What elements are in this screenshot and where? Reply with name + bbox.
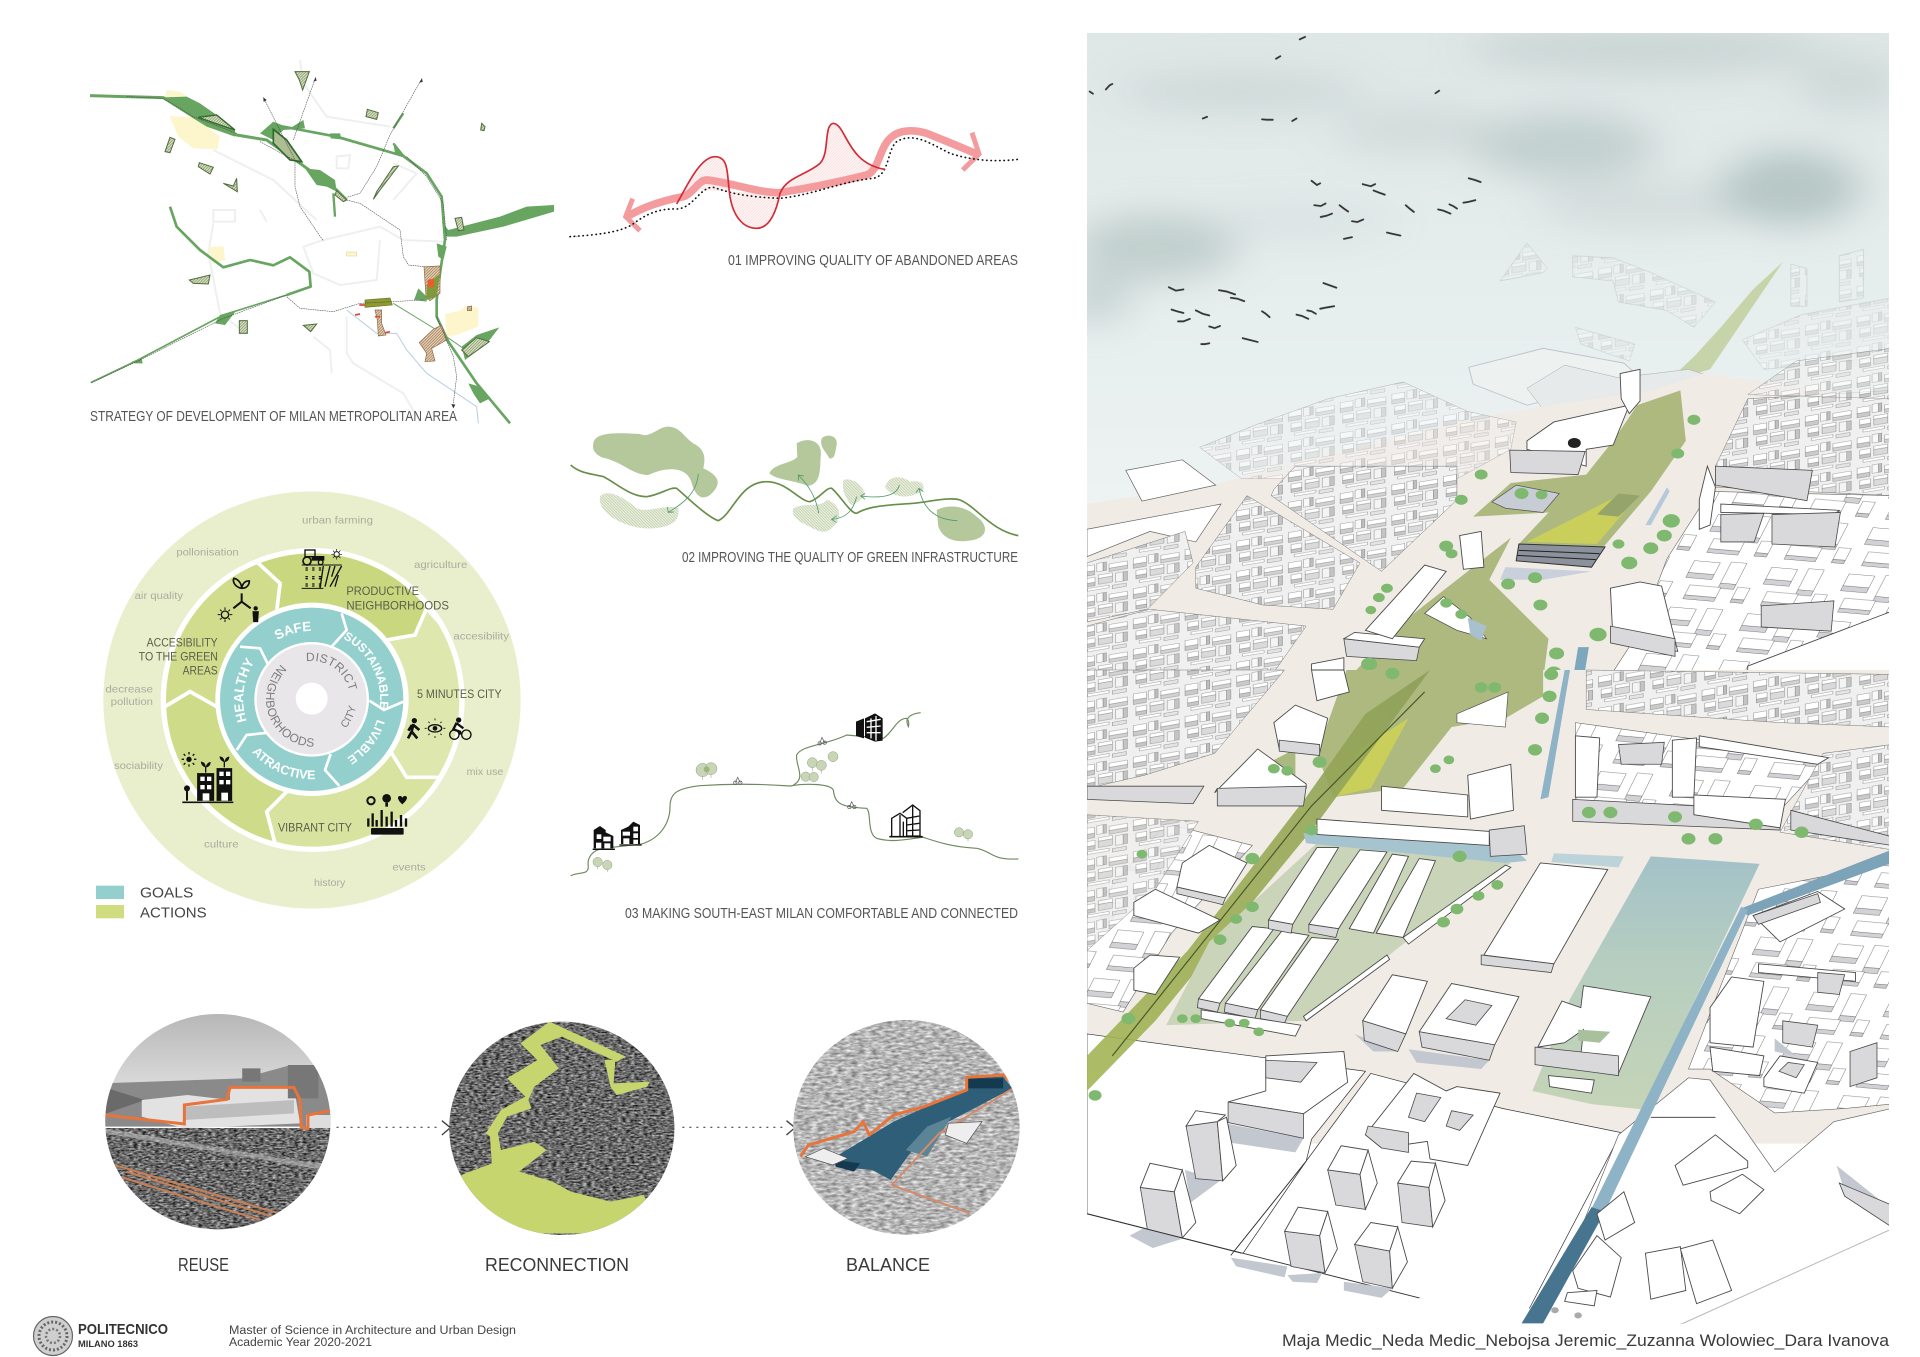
goal labels: HEALTHY [234,657,253,723]
icon: glass buildings [889,805,923,837]
arrow heads [263,77,455,408]
outer ring labels: pollution [111,697,153,708]
canal pieces [1645,487,1670,525]
pale yellow areas [165,90,478,337]
arrow [337,1121,450,1135]
icon: walk see cycle [408,717,471,739]
trees [1089,668,1809,1101]
olive central node [365,298,392,307]
clouds [1064,24,1904,323]
lower park [1356,538,1548,670]
lot boundary lines [1087,1117,1715,1255]
action labels: ACCESIBILITY [147,637,218,650]
panel: goals and actions wheel [96,491,521,921]
yellow meadow [1527,496,1624,544]
white lots [1087,723,1892,1357]
caption: 01: 01 IMPROVING QUALITY OF ABANDONED AREAS [728,252,1018,269]
goal labels: SAFE [274,622,311,639]
logo: Politecnico di Milano [34,1316,168,1356]
right side buildings [1610,466,1892,680]
pink strategy arrow [626,131,979,231]
central park buildings [1312,369,1640,680]
goal labels [234,622,388,780]
green connection arrows [667,474,957,523]
hatched brown areas and red accents [375,266,472,362]
outer ring labels: history [314,878,346,889]
outer ring labels: sociability [114,761,164,772]
pale urban network lines [208,60,443,422]
panel: reuse reconnection balance circles [102,1010,1025,1237]
caption: 03: 03 MAKING SOUTH-EAST MILAN COMFORTABLE AND CONNECTED [625,905,1018,922]
course information: Master of Science in Architecture and Urban Design [229,1325,516,1337]
dotted existing line [570,138,1018,237]
scale labels: DISTRICT [306,652,358,688]
green corridors [90,96,554,423]
outer ring [103,491,521,909]
scale labels: NEIGHBORHOODS [266,665,314,747]
green blobs [593,427,985,541]
ground and streets [1087,374,1892,680]
goal labels: ATRACTIVE [252,748,315,780]
red abandoned areas hatch [677,123,885,228]
green patches [132,97,554,403]
trees [1361,415,1700,681]
icon: green buildings [182,752,233,802]
action labels: TO THE GREEN [139,651,218,664]
outer ring labels: accesibility [453,631,510,642]
caption: 02: 02 IMPROVING THE QUALITY OF GREEN INFRASTRUCTURE [682,549,1018,566]
red line [677,123,885,228]
action labels: PRODUCTIVE [346,585,419,598]
logo: Politecnico di Milano: MILANO 1863 [78,1339,138,1350]
park upper part [1317,670,1543,797]
ground [1080,670,1899,1144]
green water lawn [1532,856,1760,1109]
authors credit: Maja Medic_Neda Medic_Nebojsa Jeremic_Zuzanna Wolowiec_Dara Ivanova [1282,1331,1890,1350]
aerial top half [1064,24,1904,681]
dense blocks [1087,670,1892,951]
birds [1090,37,1481,344]
label: balance: BALANCE [846,1254,930,1275]
far green corridor [1680,262,1782,372]
plot [1126,460,1216,501]
goal labels: SUSTAINABLE [344,632,388,708]
outer ring labels: culture [204,840,239,851]
panel: strategy map of Milan metropolitan area [90,60,577,423]
dense city blocks [1087,348,1892,680]
outer ring labels: decrease [105,685,153,696]
dashed connections [92,77,457,403]
panel: aerial masterplan view [1064,24,1904,1357]
outer ring labels: air quality [135,591,184,602]
icon: tree sun person network [218,578,259,622]
circle: reuse [102,1010,334,1235]
goals ring [220,608,403,791]
course information: Academic Year 2020-2021 [229,1337,372,1349]
icon: houses [593,822,642,849]
legend: GOALS [140,886,194,902]
outer ring labels: agriculture [414,560,468,571]
plaza with pool [1492,485,1559,512]
green corridor line [571,465,1018,536]
long row buildings [1197,848,1511,1036]
action labels: NEIGHBORHOODS [346,599,449,612]
icon: office tower [856,713,883,742]
goal labels: LIVABLE [347,720,385,764]
circle: balance [790,1018,1025,1237]
legend: ACTIONS [140,905,207,921]
right blocks [1551,891,1892,1319]
paths [571,713,1018,876]
legend [96,886,207,921]
icon: urban farming tractor and crops [302,549,342,588]
hatched project areas [165,72,489,357]
action labels: VIBRANT CITY [278,821,352,834]
label: reuse: REUSE [178,1254,229,1275]
distant hazy city [1500,243,1892,369]
blocks above plaza [1134,670,1892,994]
garden between rows [1166,843,1511,1025]
terraced building [1516,544,1605,567]
river [347,310,478,423]
canals [1740,850,1892,916]
label: reconnection: RECONNECTION [485,1254,629,1275]
scale labels: CITY [341,705,356,727]
action labels: 5 MINUTES CITY [417,688,502,701]
far city blocks [1200,382,1516,479]
upper park [1473,390,1686,548]
outer ring labels: pollonisation [176,548,239,559]
action segments [166,553,460,847]
logo: Politecnico di Milano: POLITECNICO [78,1321,168,1338]
core scale disc [257,644,367,754]
panel: diagrams 01 and 02 [570,123,1018,541]
course information [229,1325,516,1349]
aerial bottom half [1080,668,1899,1357]
sky [1087,33,1889,504]
far white complex [1469,348,1640,405]
cyclists [734,737,856,809]
action labels [139,585,502,834]
circle: reconnection [446,1020,677,1237]
icon: vibrant city bulb gear heart [367,794,407,835]
towers [1140,1111,1445,1288]
outer ring labels [105,515,510,889]
action labels: AREAS [183,665,218,678]
trees [593,752,973,872]
scale labels [266,652,358,747]
outer ring labels: urban farming [302,515,373,526]
outer ring labels: events [392,863,426,874]
linear park strip [1087,670,1430,1091]
mid blocks [1228,863,1651,1166]
hatched blobs [600,477,924,532]
panel: diagram 03 connected city [571,713,1018,876]
shadows [1130,1034,1892,1298]
outer ring labels: mix use [467,767,504,778]
caption: map: STRATEGY OF DEVELOPMENT OF MILAN METROPOLITAN AREA [90,408,457,425]
arrow [682,1121,795,1135]
